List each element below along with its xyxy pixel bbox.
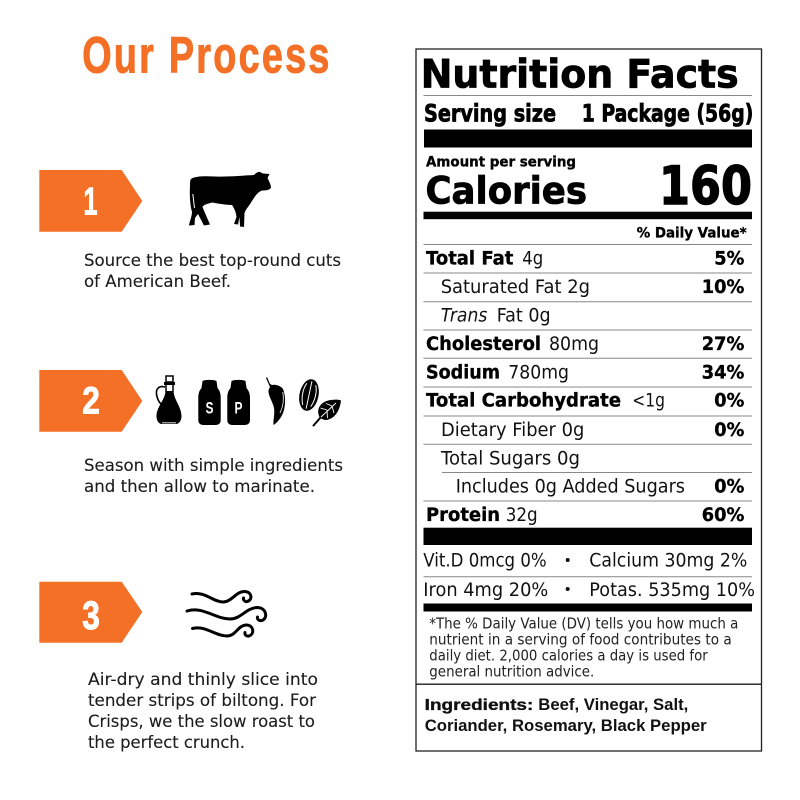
step 3 text: tender strips of biltong. For [88,691,316,711]
row: total carbohydrate: <1g [632,391,665,412]
icon: wind [187,591,266,636]
row: dietary fiber: Dietary Fiber 0g [441,420,584,441]
row: added sugars: Includes 0g Added Sugars [456,477,685,498]
step 2 text: and then allow to marinate. [84,477,315,497]
row: trans fat: Fat 0g [497,306,551,327]
row: sodium: 780mg [508,362,569,383]
step 3 text: the perfect crunch. [88,733,245,753]
serving size: 1 Package (56g) [582,100,753,128]
serving size [424,100,753,128]
ingredients divider [416,684,762,685]
step 1 text: Source the best top-round cuts [84,251,341,271]
calories block: Calories [426,168,587,212]
daily value header: % Daily Value* [637,225,747,241]
row: trans fat: Trans [441,306,488,327]
row: trans fat [441,306,551,327]
step 3 text [88,670,318,753]
row: total sugars: Total Sugars 0g [440,448,580,469]
icon: chili pepper [266,377,285,425]
step 2 text: Season with simple ingredients [84,456,343,476]
icon: salt shaker: S [206,398,214,417]
row: cholesterol: 27% [702,334,744,355]
row: sodium: 34% [702,362,744,383]
medium bar [424,212,752,219]
icon: pepper shaker: P [234,398,242,417]
micronutrients row 1: Vit.D 0mcg 0% [423,551,547,572]
row: cholesterol: 80mg [549,334,599,355]
step 1 number arrow: 1 [84,180,98,223]
step 3 text: Crisps, we the slow roast to [88,712,315,732]
step 2 number arrow [39,370,142,432]
calories block [426,155,752,217]
footnote: *The % Daily Value (DV) tells you how much a [429,614,738,632]
row: total fat: 4g [522,248,543,269]
micronutrients row 1 [423,551,747,572]
row: cholesterol [426,334,744,355]
serving size: Serving size [424,100,556,128]
footnote: nutrient in a serving of food contributes to a [429,630,732,648]
row: protein: Protein [426,505,500,526]
micronutrients row 1: Calcium 30mg 2% [589,551,747,572]
row: added sugars: 0% [714,477,744,498]
footnote [429,614,738,680]
title: Our Process [82,26,329,84]
step 3 text: Air-dry and thinly slice into [88,670,318,690]
row: total carbohydrate: Total Carbohydrate [426,391,621,412]
icon: salt shaker [198,380,221,425]
step 1 text [84,251,341,292]
ingredients: Ingredients: [425,697,533,714]
calories block: 160 [659,156,752,217]
row: total fat: Total Fat [426,248,513,269]
step 2 number arrow: 2 [82,380,100,422]
heading: nutrition facts: Nutrition Facts [421,53,739,98]
thick bar [424,130,752,148]
row: protein: 60% [702,505,744,526]
thick bar [424,528,752,545]
micronutrients row 2 [423,580,755,601]
micronutrients row 2: Iron 4mg 20% [423,580,548,601]
calories block: Amount per serving [426,155,576,171]
icon: pepper shaker [227,380,250,425]
step 2 text [84,456,343,497]
row: sodium: Sodium [426,362,500,383]
icon: oil bottle [156,376,182,424]
row: total carbohydrate: 0% [714,391,744,412]
micronutrients row 2: Potas. 535mg 10% [589,580,755,601]
row: saturated fat: Saturated Fat 2g [441,277,590,298]
footnote: general nutrition advice. [429,662,594,680]
process column [39,26,343,753]
medium bar [424,604,752,612]
row: total fat: 5% [714,248,744,269]
step 1 [39,170,341,292]
row: protein [426,505,744,526]
row: protein: 32g [506,505,538,526]
row: cholesterol: Cholesterol [426,334,541,355]
step 3 [39,582,318,753]
step 3 number arrow: 3 [82,594,100,638]
row: sodium [426,362,744,383]
ingredients: Coriander, Rosemary, Black Pepper [425,716,707,735]
step 1 number arrow [39,170,142,232]
panel: nutrition facts label [416,49,762,751]
ingredients [425,695,707,735]
row: dietary fiber [441,420,744,441]
row: total fat [426,248,744,269]
step 1 text: of American Beef. [84,272,231,292]
row: dietary fiber: 0% [714,420,744,441]
icon: coriander pods [296,377,341,426]
step 2 [39,370,343,497]
row: saturated fat [441,277,744,298]
row: total carbohydrate [426,391,744,412]
label border [416,49,762,751]
ingredients: Beef, Vinegar, Salt, [538,695,688,714]
row: saturated fat: 10% [702,277,744,298]
step 3 number arrow [39,582,142,643]
icon: cow [189,172,271,227]
footnote: daily diet. 2,000 calories a day is used for [429,646,708,664]
